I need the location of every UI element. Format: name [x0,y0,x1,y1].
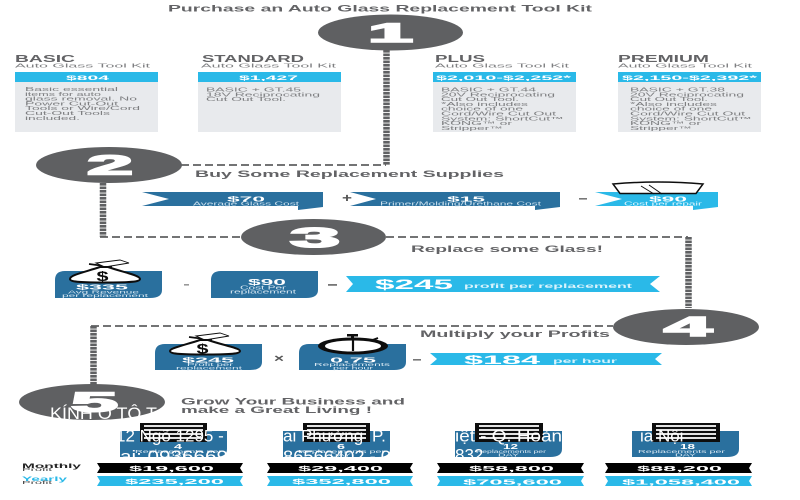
banner: cost per repair: Cost per repair [624,202,703,208]
panel: plus kit: choice of one [441,107,523,113]
card: cost per replacement: replacement [230,290,297,296]
panel: standard kit: Auto Glass Tool Kit [201,64,337,70]
operator: minus [579,198,587,200]
card: average revenue: $335 [76,282,128,292]
heading: step 2: Buy Some Replacement Supplies [195,169,504,180]
panel: basic kit: Basic essential [25,87,118,93]
operator: plus: + [342,191,352,205]
panel: basic kit: $804 [66,75,110,82]
column: 12 replacements per day: Replacements per [476,449,547,454]
banner: profit per replacement: profit per replacement [464,283,634,290]
row labels: monthly and yearly profit: Monthly [22,463,82,470]
panel: premium kit: choice of one [630,107,712,113]
banner: profit per replacement: $245 [375,276,454,292]
panel: plus kit: BASIC + GT.44 [441,88,536,94]
panel: standard kit: BASIC + GT.45 [206,88,301,94]
card: average revenue: Avg Revenue [68,290,140,296]
heading: step 5 [181,396,405,416]
column: 18 replacements per day: $88,200 [637,464,722,473]
card: profit per replacement: $245 [182,356,234,364]
heading: step 5: make a Great Living ! [181,405,372,416]
operator: minus [328,284,337,286]
operator: minus [184,284,189,286]
panel: basic kit: included. [25,116,80,122]
panel: plus kit: $2,010-$2,252* [436,75,572,82]
step 3 badge [241,219,386,255]
banner: profit per replacement [346,276,660,292]
heading: step 3: Replace some Glass! [411,244,603,255]
row labels: monthly and yearly profit: Profit [22,467,54,472]
row labels: monthly and yearly profit [22,463,82,485]
column: 18 replacements per day: DAY [675,452,696,458]
panel: premium kit: Auto Glass Tool Kit [618,64,753,70]
step 5 badge: 5 [71,386,118,418]
step 2 badge [36,147,182,183]
column: 18 replacements per day: $1,058,400 [622,478,740,486]
column: 4 replacements per day: 4 [174,444,182,451]
card: cost per replacement: $90 [248,278,288,287]
watermark: contact text: ai Phường [283,426,363,446]
panel: plus kit: KONG™ or [441,121,513,127]
panel: plus kit: *Also includes [441,102,529,108]
card: profit per replacement: Profit per [187,362,234,368]
banner: profit per hour: per hour [553,359,619,365]
panel: premium kit: BASIC + GT.38 [630,88,725,94]
column: 6 replacements per day: Replacements per [298,449,386,454]
column: 4 replacements per day: Replacements per [135,449,223,454]
column: 6 replacements per day: DAY [330,452,351,458]
watermark: contact text: 832 [455,446,483,464]
panel: plus kit: Stripper™ [441,126,503,132]
row labels: monthly and yearly profit: Profit [22,480,54,485]
panel: premium kit: Stripper™ [630,126,692,132]
panel: plus kit: PLUS [435,54,486,65]
column: 12 replacements per day: $58,800 [469,464,554,473]
card: replacements per hour [299,334,406,372]
column: 18 replacements per day: Replacements per [638,449,726,454]
card: replacements per hour: 0.75 [330,356,376,364]
watermark: contact text: 86566402 - 0 [283,447,391,466]
heading: step 4: Multiply your Profits [420,329,610,340]
banner: cost per repair: $90 [649,194,687,204]
banner: profit per hour [430,353,662,367]
card: cost per replacement [211,271,318,298]
panel: basic kit: Auto Glass Tool Kit [15,64,151,70]
watermark: contact text: ai: 0936669 [120,447,228,466]
card: replacements per hour: Replacements [314,362,391,368]
watermark: contact text [50,404,683,466]
watermark: contact text: 12 Ngõ 1295 - [116,426,224,446]
card: profit per replacement [155,333,262,372]
column: 18 replacements per day [605,423,752,486]
banner: cost per repair [595,192,718,210]
column: 12 replacements per day [437,423,584,486]
column: 12 replacements per day: DAY [498,452,519,458]
panel: basic kit: BASIC [15,54,75,65]
column: 12 replacements per day: $705,600 [463,478,562,486]
column: 18 replacements per day: 18 [680,444,695,451]
banner: glass cost: $70 [227,194,265,204]
panel: premium kit: 20V Reciprocating [630,92,744,98]
panel: plus kit: Auto Glass Tool Kit [435,64,570,70]
operator: minus [413,359,421,361]
banner: primer cost: Primer/Molding/Urethane Cost [380,202,542,208]
panel: standard kit: $1,427 [239,75,299,82]
row labels: monthly and yearly profit: Yearly [22,476,68,483]
icon: windshield stack [303,423,370,442]
column: 4 replacements per day [97,423,243,486]
banner: profit per hour: $184 [464,353,541,367]
card: cost per replacement: Cost Per [240,286,287,292]
column: 6 replacements per day [267,423,413,486]
title: Purchase an Auto Glass Replacement Tool Kit [168,4,594,14]
step 1 badge [318,14,463,50]
panel: basic kit [15,54,158,132]
panel: plus kit: Cord/Wire Cut Out [441,112,557,118]
icon: windshield stack [475,423,543,442]
icon: money bag: $ [196,340,209,356]
icon: money bag: $ [96,268,109,284]
panel: plus kit: 20V Reciprocating [441,92,555,98]
panel: premium kit: PREMIUM [618,54,709,65]
banner: glass cost: Average Glass Cost [193,202,300,208]
banner: primer cost [350,192,560,210]
icon: stopwatch [318,334,388,354]
panel: premium kit [618,54,761,132]
column: 4 replacements per day: $19,600 [129,464,214,473]
column: 6 replacements per day: 6 [337,444,345,451]
card: average revenue: per replacement [62,293,150,299]
panel: standard kit: STANDARD [202,54,304,65]
step 1 badge: 1 [368,18,413,48]
panel: premium kit: $2,150-$2,392* [622,75,758,82]
watermark: contact text: KÍNH Ô TÔ T [50,404,157,423]
panel: premium kit: Cut Out Tool. [630,97,708,103]
column: 6 replacements per day: $352,800 [292,477,391,486]
column: 12 replacements per day: 12 [503,444,518,451]
panel: plus kit: Cut Out Tool. [441,97,519,103]
step 4 badge [613,309,759,345]
banner: primer cost: $15 [447,194,485,204]
step 4 badge: 4 [664,311,713,342]
icon: windshield stack [140,423,207,442]
card: average revenue [55,260,162,299]
card: profit per replacement: replacement [176,366,244,372]
watermark: contact text: ia Nội [640,426,683,446]
panel: basic kit: Cut-Out Tools [25,111,111,117]
panel: plus kit [433,54,576,132]
step 3 badge: 3 [290,222,340,253]
panel: basic kit: glass removal. No [25,97,137,103]
icon: windshield [613,182,703,194]
panel: premium kit: *Also includes [630,102,718,108]
panel: standard kit: 18V Reciprocating [206,92,320,98]
panel: premium kit: Cord/Wire Cut Out [630,112,746,118]
card: replacements per hour: per hour [333,366,374,372]
banner: glass cost [142,192,323,210]
panel: basic kit: Power Cut-Out [25,101,119,107]
operator: multiply: × [274,353,284,365]
icon: windshield stack [652,423,720,442]
watermark: contact text: P. [372,426,386,446]
column: 4 replacements per day: $235,200 [125,477,224,486]
panel: standard kit: Cut Out Tool. [206,97,286,103]
panel: premium kit: KONG™ or [630,121,702,127]
connector path between steps [91,50,688,386]
panel: basic kit: items for auto [25,92,101,98]
column: 6 replacements per day: $29,400 [298,464,383,473]
column: 4 replacements per day: DAY [167,452,188,458]
watermark: contact text: iệt - Q. Hoàn [455,426,562,446]
panel: basic kit: Tools or Wire/Cord [25,106,140,112]
step 5 badge [19,384,165,420]
panel: premium kit: System: ShortCut™ [630,116,752,122]
step 2 badge: 2 [87,150,133,180]
panel: standard kit [198,54,341,132]
heading: step 5: Grow Your Business and [181,396,405,408]
panel: plus kit: System: ShortCut™ [441,116,564,122]
